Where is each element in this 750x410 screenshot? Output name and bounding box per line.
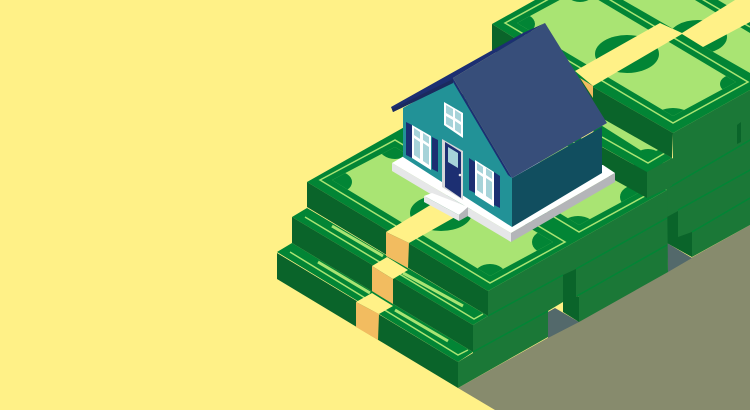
bill 2	[409, 88, 654, 232]
paper band on top bundle	[386, 204, 455, 243]
middle back bundle	[590, 115, 672, 198]
roof edge	[453, 78, 512, 178]
top bundle	[307, 81, 667, 316]
foundation	[392, 156, 615, 242]
left and right faces	[492, 24, 593, 113]
illustration: isometric house on stacks of cash	[277, 0, 750, 410]
ground shadow	[458, 225, 750, 410]
door	[442, 139, 463, 200]
paper band on back bundle	[575, 0, 750, 86]
side wall	[512, 127, 602, 227]
roof overhang underside	[392, 79, 453, 112]
roof	[453, 23, 607, 178]
back right stack: side faces	[647, 90, 750, 257]
left window with shutters	[406, 122, 438, 172]
shadow gaps between stacks	[548, 243, 692, 338]
right faces of front stack	[458, 190, 668, 388]
roof overhang	[391, 23, 545, 112]
front wall	[403, 80, 512, 227]
front money stack	[277, 81, 668, 388]
bill C field	[623, 0, 750, 73]
bill 1	[320, 140, 565, 283]
upper window	[444, 102, 463, 138]
bill A	[505, 0, 748, 123]
middle bundle	[292, 208, 488, 352]
house	[391, 23, 615, 242]
bottom bundle	[277, 243, 473, 388]
top back money bundle	[492, 0, 750, 158]
right window with shutters	[469, 158, 500, 208]
front steps	[424, 193, 468, 221]
